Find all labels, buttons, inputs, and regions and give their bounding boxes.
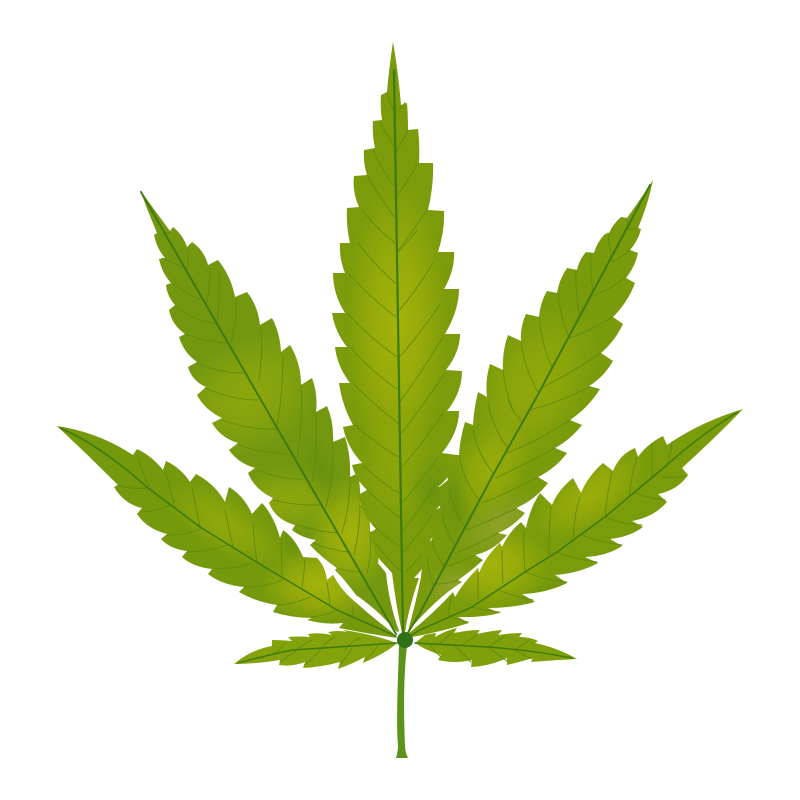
lower right leaflet [408,409,743,637]
small left leaflet [234,630,397,669]
stem node [397,632,413,648]
stem [396,646,408,758]
leaf illustration [57,42,743,758]
small right leaflet [415,628,577,667]
lower left leaflet [57,426,397,638]
upper right leaflet [406,180,653,636]
center leaflet [332,42,462,634]
upper left leaflet [140,190,399,634]
